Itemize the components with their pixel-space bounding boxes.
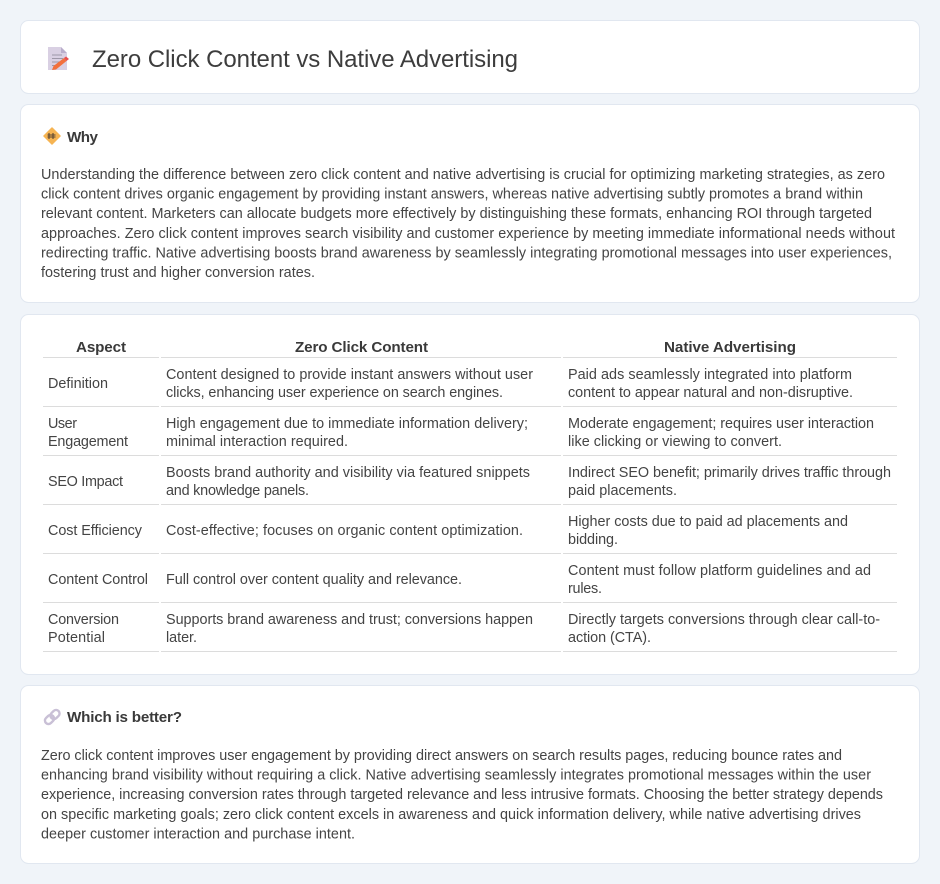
table row: content control: Full control over content quality and relevance. (166, 572, 462, 588)
table row: content control: rules. (568, 581, 602, 597)
icon: chain link (43, 708, 61, 726)
table row: conversion potential (43, 612, 897, 652)
text block: which is better paragraph: enhancing brand visibility without requiring a click. Native advertising seamlessly integrates promotional messages within the user (41, 768, 871, 784)
table row: definition: content to appear natural and non-disruptive. (568, 385, 853, 401)
table row: cost efficiency: Cost Efficiency (48, 523, 143, 539)
text block: which is better paragraph: Zero click content improves user engagement by providing direct answers on search results pages, reducing bounce rates and (41, 748, 842, 764)
table row: seo impact (43, 465, 897, 505)
text block: why paragraph: approaches. Zero click content improves search visibility and customer experience by meeting immediate informational needs without (41, 226, 895, 242)
heading: which is better: Which is better? (67, 709, 182, 726)
text block: why paragraph: fostering trust and higher conversion rates. (41, 265, 315, 281)
table row: conversion potential: Supports brand awareness and trust; conversions happen (166, 612, 533, 628)
table row: definition: Paid ads seamlessly integrated into platform (568, 367, 852, 383)
text block: why paragraph: redirecting traffic. Native advertising boosts brand awareness by seamlessly integrating promotional messages into user experiences, (41, 245, 892, 261)
table header row: Native Advertising (664, 339, 796, 356)
icon: document with pencil (48, 47, 69, 70)
table row: definition: Content designed to provide instant answers without user (166, 367, 533, 383)
table row: conversion potential: Potential (48, 630, 105, 646)
table row: content control: Content Control (48, 572, 148, 588)
table row: content control (43, 563, 897, 603)
table row: definition: clicks, enhancing user experience on search engines. (166, 385, 503, 401)
table header row: Aspect (76, 339, 126, 356)
table row: content control: Content must follow platform guidelines and ad (568, 563, 871, 579)
panel: header (20, 20, 920, 94)
table row: user engagement (43, 416, 897, 456)
table row: user engagement: High engagement due to immediate information delivery; (166, 416, 528, 432)
table row: cost efficiency: Cost-effective; focuses on organic content optimization. (166, 523, 523, 539)
table header row (43, 339, 897, 358)
table row: user engagement: Engagement (48, 434, 128, 450)
panel: why (20, 104, 920, 302)
table row: definition: Definition (48, 376, 108, 392)
table row: conversion potential: Directly targets conversions through clear call-to- (568, 612, 880, 628)
text block: why paragraph: Understanding the difference between zero click content and native advertising is crucial for optimizing marketing strategies, as zero (41, 167, 885, 183)
table row: user engagement: like clicking or viewing to convert. (568, 434, 782, 450)
table row: seo impact: SEO Impact (48, 474, 123, 490)
table row: conversion potential: Conversion (48, 612, 119, 628)
icon: warning diamond (44, 128, 60, 144)
table row: cost efficiency: bidding. (568, 532, 618, 548)
table row: cost efficiency: Higher costs due to paid ad placements and (568, 514, 848, 530)
text block: why paragraph: click content drives organic engagement by providing instant answers, whereas native advertising subtly promotes a brand within (41, 187, 863, 203)
table row: user engagement: Moderate engagement; requires user interaction (568, 416, 874, 432)
table row: user engagement: minimal interaction required. (166, 434, 348, 450)
table row: seo impact: Indirect SEO benefit; primarily drives traffic through (568, 465, 891, 481)
panel: which is better (20, 686, 920, 864)
heading: why: Why (67, 129, 99, 146)
table row: seo impact: Boosts brand authority and visibility via featured snippets (166, 465, 530, 481)
text block: which is better paragraph: deeper customer interaction and purchase intent. (41, 826, 355, 842)
table row: user engagement: User (48, 416, 77, 432)
text block: which is better paragraph (41, 748, 883, 842)
table row: conversion potential: action (CTA). (568, 630, 651, 646)
text block: why paragraph: relevant content. Marketers can allocate budgets more effectively by distinguishing these formats, enhancing ROI through targeted (41, 206, 872, 222)
text block: which is better paragraph: experience, increasing conversion rates through targeted relevance and less intrusive formats. Choosing the better strategy depends (41, 787, 883, 803)
table row: seo impact: paid placements. (568, 483, 677, 499)
text block: which is better paragraph: on specific marketing goals; zero click content excels in awareness and quick information delivery, while native advertising drives (41, 807, 861, 823)
table row: definition (43, 367, 897, 407)
table header row: Zero Click Content (295, 339, 428, 356)
table row: cost efficiency (43, 514, 897, 554)
table row: seo impact: and knowledge panels. (166, 483, 309, 499)
text block: why paragraph (41, 167, 895, 281)
table row: conversion potential: later. (166, 630, 197, 646)
title: Zero Click Content vs Native Advertising (92, 46, 518, 73)
panel: comparison table (20, 314, 920, 674)
